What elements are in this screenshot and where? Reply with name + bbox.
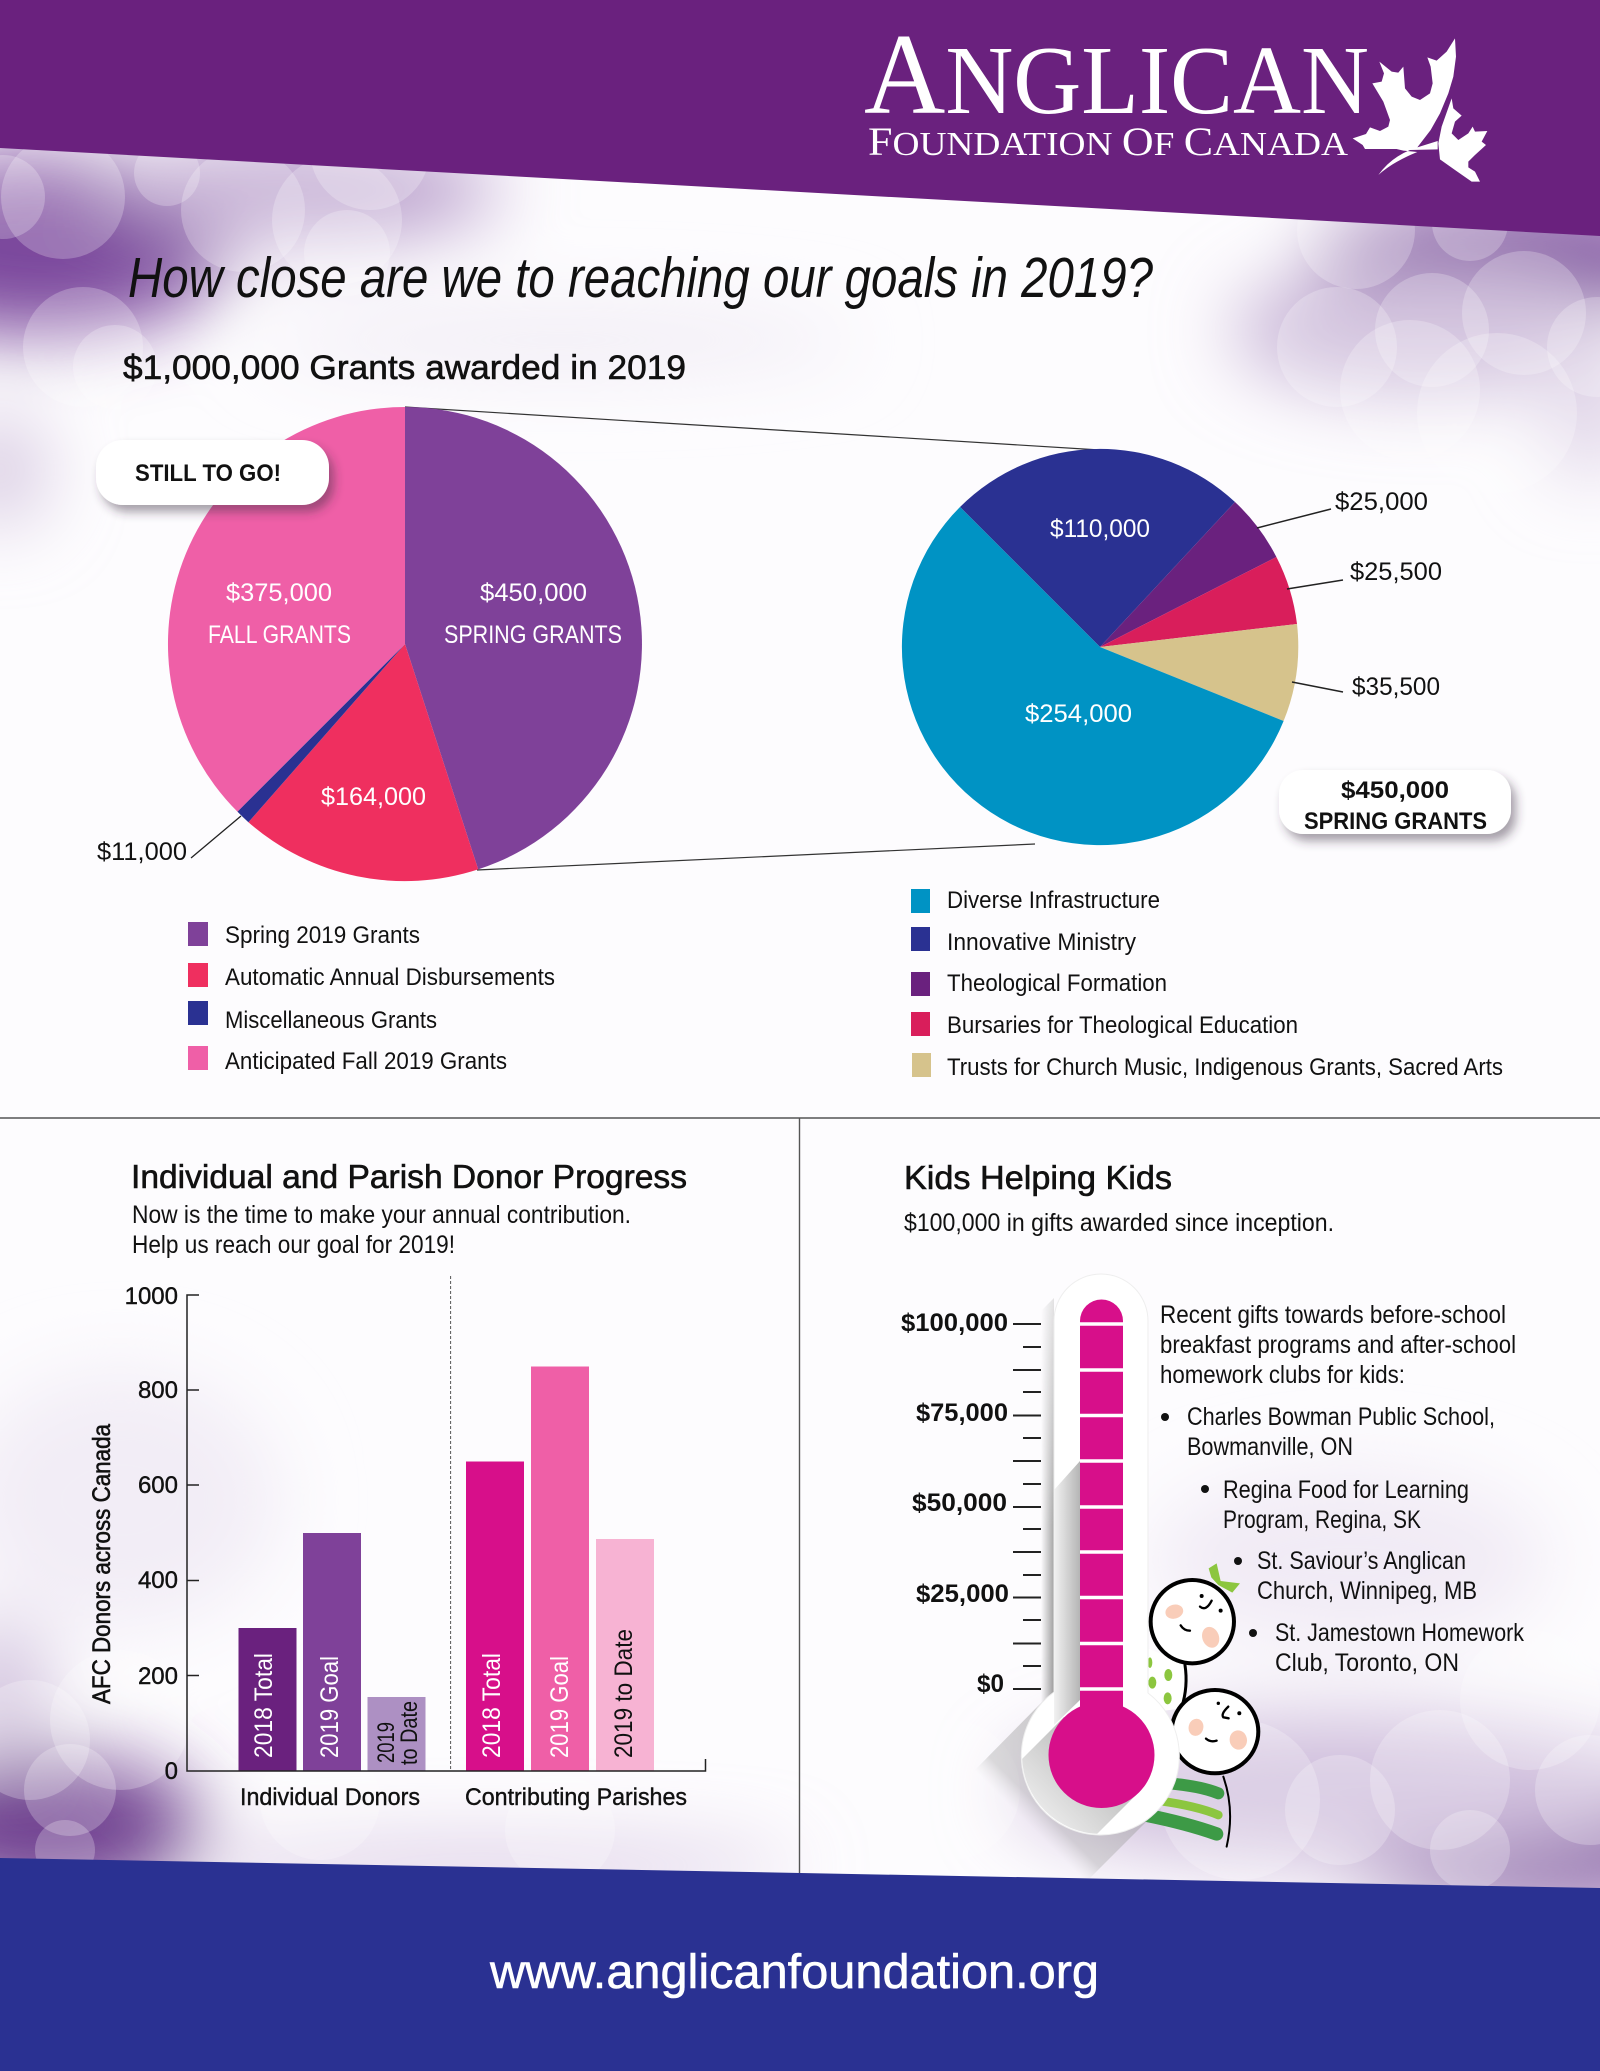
bar chart: 200 <box>138 1663 178 1690</box>
thermometer <box>901 1274 1179 1882</box>
bar chart: 400 <box>138 1567 178 1594</box>
bar chart: 2019 <box>373 1722 400 1763</box>
callout: still to go: STILL TO GO! <box>135 460 281 487</box>
legend: spring grants: Trusts for Church Music, Indigenous Grants, Sacred Arts <box>947 1054 1503 1081</box>
bar chart: Contributing Parishes <box>465 1784 687 1811</box>
pie chart: 2019 grants: $164,000 <box>321 783 426 811</box>
text: recent gifts list: Charles Bowman Public School, <box>1187 1403 1495 1431</box>
footer website url: www.anglicanfoundation.org <box>489 1946 1099 1999</box>
footer band <box>0 1858 1600 2071</box>
callout: still to go <box>96 440 329 505</box>
text: gifts awarded: $100,000 in gifts awarded since inception. <box>904 1209 1334 1237</box>
illustration: two kids <box>1143 1563 1258 1847</box>
callout: spring grants total: $450,000 <box>1341 777 1449 804</box>
pie chart: spring grants breakdown: $110,000 <box>1050 515 1150 543</box>
bar chart: Individual Donors <box>240 1784 420 1811</box>
pie chart: 2019 grants <box>168 407 642 881</box>
title: How close are we to reaching our goals in 2019? <box>128 246 1153 310</box>
callout: $25,000: $25,000 <box>1335 488 1428 516</box>
callout: $35,500 <box>1292 673 1440 701</box>
pie chart: 2019 grants: $450,000 <box>480 579 587 607</box>
legend: spring grants: Diverse Infrastructure <box>947 887 1160 914</box>
text: recent gifts list: St. Jamestown Homework <box>1275 1619 1524 1647</box>
callout: $25,000 <box>1257 488 1428 528</box>
callout: $11,000 <box>97 816 241 866</box>
legend: 2019 grants: Miscellaneous Grants <box>225 1007 437 1034</box>
bar chart: 1000 <box>125 1283 178 1310</box>
pie chart: spring grants breakdown: $254,000 <box>1025 700 1132 728</box>
bar chart: AFC Donors across Canada <box>88 1424 116 1704</box>
text: recent gifts list: Club, Toronto, ON <box>1275 1649 1459 1677</box>
logo: Anglican Foundation of Canada: ANGLICAN <box>864 11 1369 139</box>
text: recent gifts list: homework clubs for kids: <box>1160 1361 1405 1389</box>
text: recent gifts list: Program, Regina, SK <box>1223 1506 1421 1534</box>
bar chart: 0 <box>165 1758 178 1785</box>
icon: maple leaf <box>1353 38 1487 182</box>
logo: Anglican Foundation of Canada: FOUNDATION OF CANADA <box>868 119 1348 164</box>
heading: donor progress: Individual and Parish Donor Progress <box>131 1158 687 1195</box>
panel: kids helping kids <box>901 1159 1524 1882</box>
text: recent gifts list: Recent gifts towards before-school <box>1160 1301 1506 1329</box>
text: donor call to action: Help us reach our goal for 2019! <box>132 1231 455 1259</box>
legend: 2019 grants: Automatic Annual Disbursements <box>225 964 555 991</box>
text: recent gifts list: Church, Winnipeg, MB <box>1257 1577 1477 1605</box>
legend: spring grants: Theological Formation <box>947 970 1167 997</box>
text: recent gifts list: Regina Food for Learning <box>1223 1476 1469 1504</box>
bar chart: to Date <box>396 1701 423 1765</box>
text: donor call to action: Now is the time to make your annual contribution. <box>132 1201 631 1229</box>
callout: $11,000: $11,000 <box>97 838 187 866</box>
pie chart: 2019 grants: SPRING GRANTS <box>444 621 622 649</box>
legend: 2019 grants: Anticipated Fall 2019 Grants <box>225 1048 507 1075</box>
callout: spring grants total <box>1279 770 1511 835</box>
logo: Anglican Foundation of Canada <box>864 11 1487 182</box>
callout: spring grants total: SPRING GRANTS <box>1304 808 1487 835</box>
section dividers <box>0 1118 1600 1873</box>
thermometer: $100,000 <box>901 1309 1008 1337</box>
bar chart: 2019 Goal <box>546 1656 574 1758</box>
legend: 2019 grants: Spring 2019 Grants <box>225 922 420 949</box>
header band <box>0 0 1600 236</box>
text: recent gifts list: breakfast programs and after-school <box>1160 1331 1516 1359</box>
pie chart: 2019 grants: FALL GRANTS <box>208 621 351 649</box>
legend: 2019 grants <box>188 922 555 1075</box>
text: recent gifts list <box>1160 1301 1524 1677</box>
bar chart: 2019 to Date <box>610 1629 638 1758</box>
bar chart: 2018 Total <box>478 1653 506 1758</box>
bar chart: 600 <box>138 1472 178 1499</box>
legend: spring grants <box>911 887 1503 1081</box>
legend: spring grants: Bursaries for Theological Education <box>947 1012 1298 1039</box>
thermometer: $50,000 <box>912 1489 1007 1517</box>
heading: kids helping kids: Kids Helping Kids <box>904 1159 1172 1196</box>
callout: $25,500: $25,500 <box>1350 558 1442 586</box>
bar chart <box>88 1276 706 1811</box>
thermometer: $75,000 <box>916 1399 1008 1427</box>
callout: $25,500 <box>1287 558 1442 589</box>
bar chart: 2019 Goal <box>316 1656 344 1758</box>
thermometer: $0 <box>977 1670 1004 1698</box>
panel: donor progress <box>88 1158 706 1811</box>
callout: $35,500: $35,500 <box>1352 673 1440 701</box>
legend: spring grants: Innovative Ministry <box>947 929 1136 956</box>
pie chart: 2019 grants: $375,000 <box>226 579 332 607</box>
connector lines between pies <box>405 407 1100 870</box>
bar chart: 800 <box>138 1377 178 1404</box>
text: recent gifts list: St. Saviour’s Anglican <box>1257 1547 1466 1575</box>
heading: grants awarded: $1,000,000 Grants awarded in 2019 <box>123 349 686 387</box>
text: donor call to action <box>132 1201 631 1259</box>
bar chart: 2018 Total <box>250 1653 278 1758</box>
pie chart: spring grants breakdown <box>902 449 1298 845</box>
text: recent gifts list: Bowmanville, ON <box>1187 1433 1353 1461</box>
thermometer: $25,000 <box>916 1580 1009 1608</box>
